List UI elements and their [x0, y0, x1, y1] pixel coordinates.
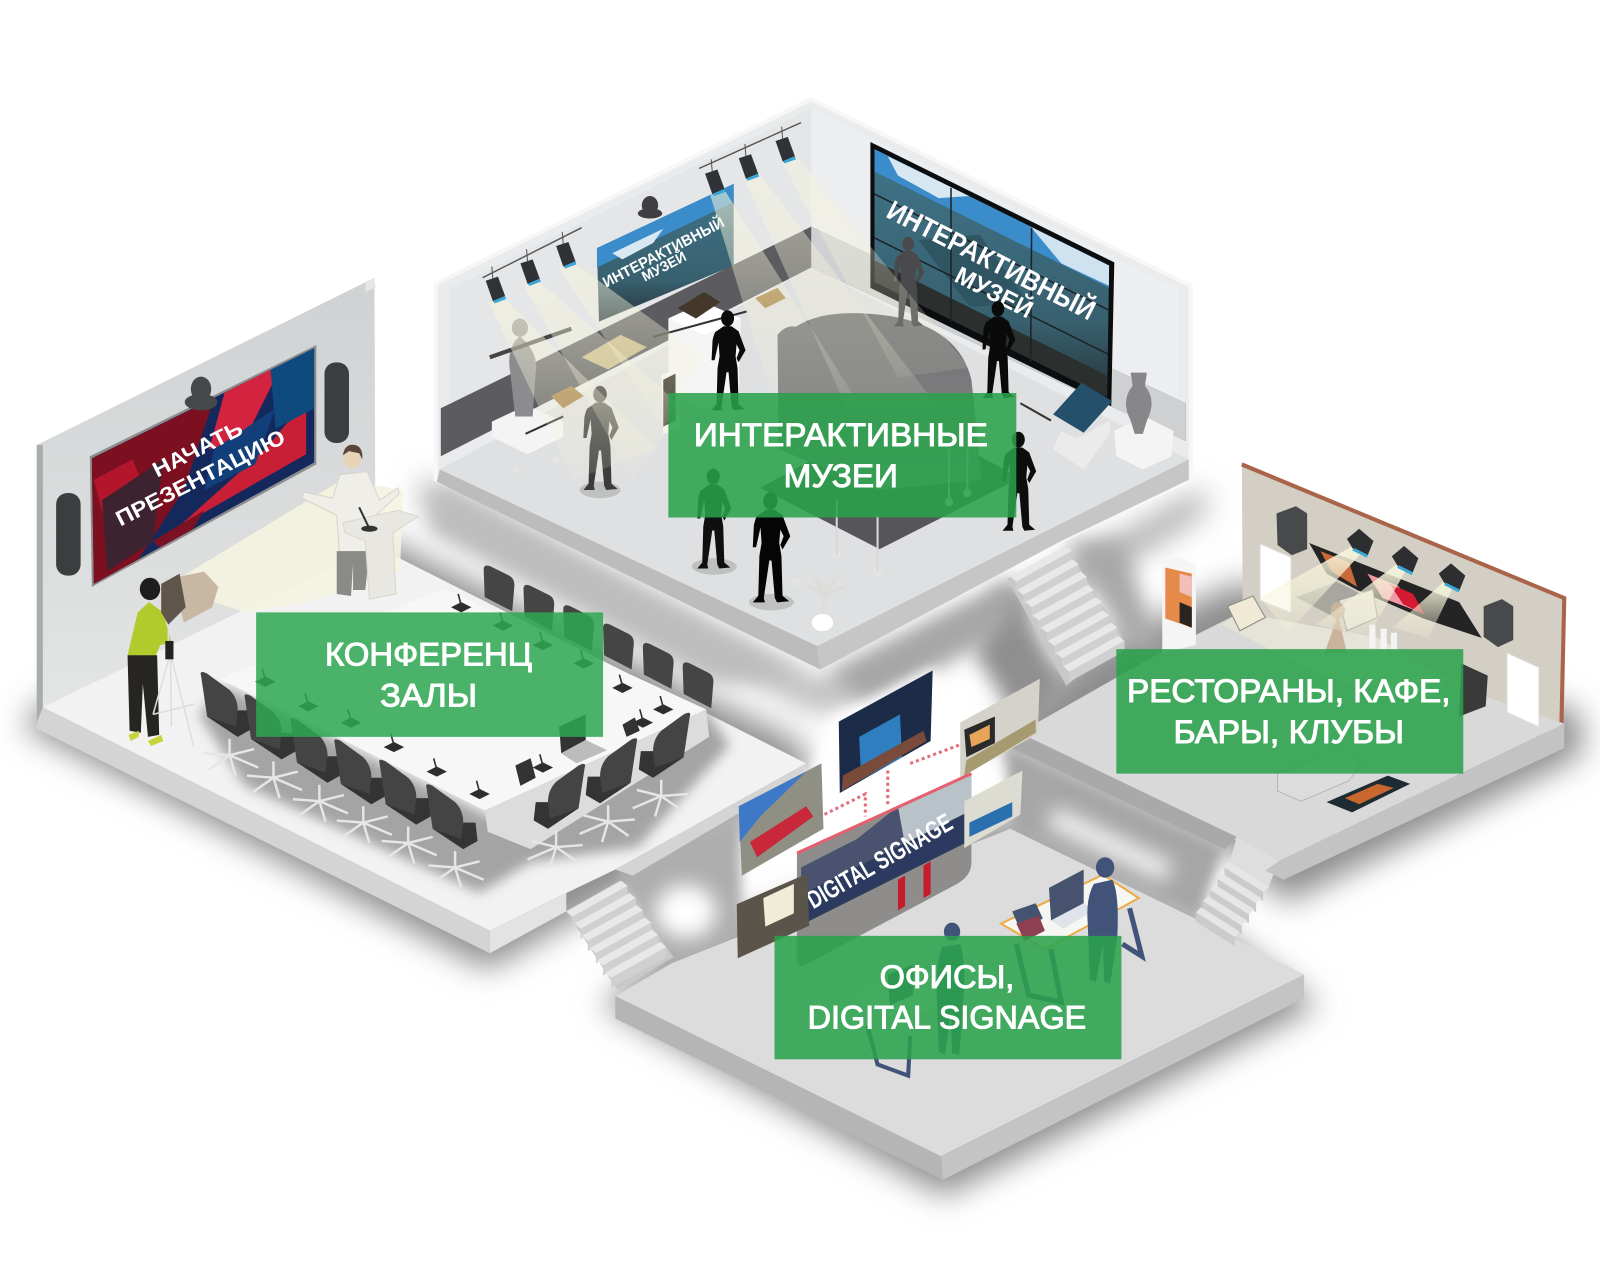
presenter and podium — [302, 445, 418, 599]
restaurant wall — [1242, 462, 1565, 737]
photo right — [960, 679, 1040, 778]
plant — [801, 572, 851, 632]
gap shading — [429, 490, 1224, 975]
ptz camera — [638, 196, 662, 219]
panel: conference room — [37, 278, 806, 953]
photo top centre — [839, 671, 933, 793]
photo lower left — [737, 874, 809, 958]
label: museums: ИНТЕРАКТИВНЫЕ — [694, 416, 988, 453]
photo left — [739, 763, 823, 876]
visitors — [580, 237, 1036, 610]
sofa — [1278, 750, 1362, 801]
stairs: restaurant to office — [1196, 862, 1268, 946]
desk and worker — [1001, 857, 1142, 1002]
conference slab — [37, 707, 490, 953]
museum floor — [440, 267, 1189, 646]
vase — [1126, 373, 1152, 434]
small museum screen — [597, 184, 734, 322]
back row chairs — [484, 565, 713, 708]
waitress — [1324, 602, 1347, 653]
chair shadow — [199, 686, 730, 893]
label: restaurants — [1116, 649, 1463, 774]
video wall: ИНТЕРАКТИВНЫЙ — [882, 194, 1101, 326]
main signage image — [797, 774, 971, 966]
statue — [509, 319, 536, 416]
label: restaurants: БАРЫ, КЛУБЫ — [1173, 713, 1404, 750]
panel: digital signage photos — [737, 669, 1040, 966]
label: restaurants: РЕСТОРАНЫ, КАФЕ, — [1127, 672, 1451, 709]
restaurant slab — [1001, 733, 1237, 849]
label: museums — [668, 393, 1016, 517]
label: museums: МУЗЕИ — [784, 457, 898, 494]
office slab — [615, 996, 943, 1180]
counter and cases — [1222, 582, 1488, 716]
platform shadows — [22, 480, 1582, 1196]
photo lower right — [964, 771, 1022, 848]
touch table — [1327, 776, 1410, 812]
office floor — [615, 829, 1304, 1156]
presentation screen: ПРЕЗЕНТАЦИЮ — [112, 425, 289, 531]
panel: office — [615, 829, 1304, 1180]
doors — [1260, 544, 1539, 727]
menu kiosk — [1162, 556, 1196, 653]
conference table — [219, 589, 709, 849]
video wall: МУЗЕЙ — [950, 261, 1038, 324]
ceiling lights and beams — [1260, 529, 1465, 638]
restaurant floor — [1019, 612, 1564, 861]
museum back walls — [436, 99, 1191, 653]
stairs: museum to restaurant — [1007, 546, 1124, 686]
main signage image: DIGITAL SIGNAGE — [802, 809, 958, 915]
wall speakers — [56, 362, 349, 576]
stairs: conference to office — [566, 881, 673, 990]
white pedestals — [492, 288, 1173, 470]
projection beam — [173, 480, 403, 612]
label: offices — [774, 936, 1121, 1059]
conference wall — [37, 278, 376, 727]
menu boards — [1309, 543, 1482, 638]
rope posts — [511, 311, 1051, 586]
mammoth exhibit — [760, 313, 1020, 549]
front row chairs — [201, 672, 690, 888]
conference camera — [185, 377, 217, 410]
video camera operator — [128, 572, 218, 747]
microphones — [255, 594, 673, 799]
label: offices: ОФИСЫ, — [880, 958, 1014, 995]
label: conference rooms: ЗАЛЫ — [380, 676, 477, 713]
video wall — [870, 142, 1114, 406]
dotted connectors — [824, 745, 959, 816]
museum slab — [437, 470, 820, 670]
panel: restaurant — [1001, 462, 1565, 890]
small museum screen: ИНТЕРАКТИВНЫЙ — [600, 213, 727, 291]
label: conference rooms — [256, 612, 603, 737]
speakers — [1277, 506, 1513, 647]
label: offices: DIGITAL SIGNAGE — [808, 999, 1086, 1036]
presentation screen: НАЧАТЬ — [149, 416, 247, 482]
presentation screen — [87, 342, 321, 592]
museum baseboard — [441, 227, 1186, 456]
laptop and tablets — [515, 714, 640, 786]
white backdrop — [796, 669, 964, 867]
second workstation under label — [850, 923, 964, 1076]
conference floor — [43, 546, 806, 931]
panel: museum room — [436, 99, 1191, 670]
spotlights — [483, 123, 969, 480]
label: conference rooms: КОНФЕРЕНЦ — [325, 635, 532, 672]
small museum screen: МУЗЕЙ — [638, 247, 689, 285]
